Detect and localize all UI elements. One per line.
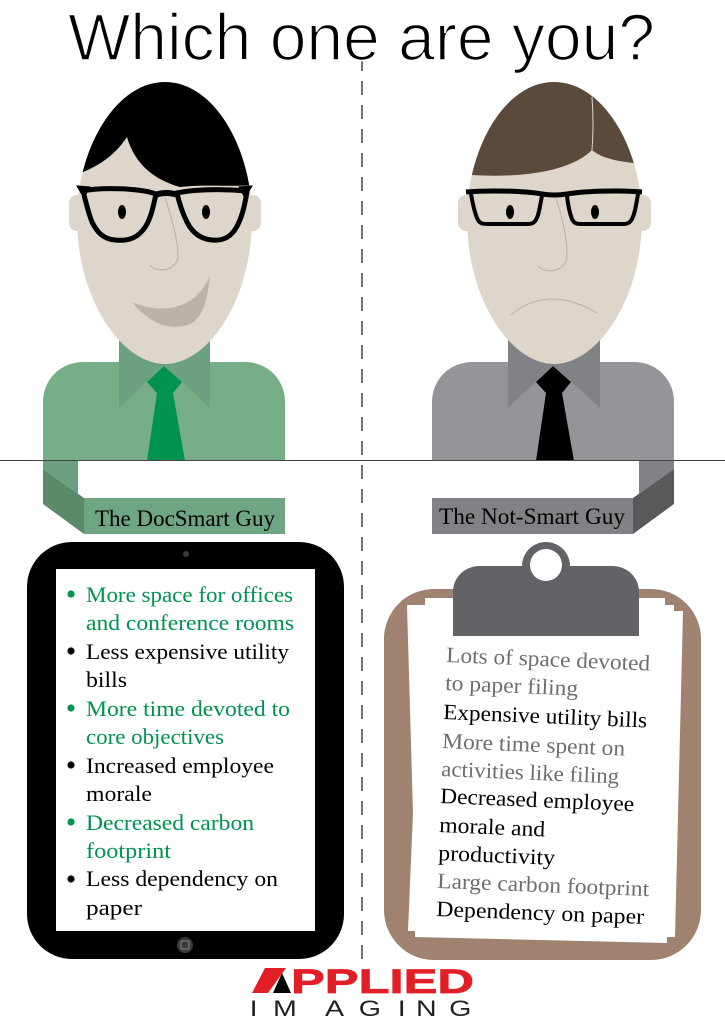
- shoulders: gray shirt: [432, 362, 674, 461]
- label ribbon: The DocSmart Guy: [43, 461, 285, 534]
- benefits list: Decreased carbon: [86, 810, 254, 835]
- left ear: [69, 195, 85, 231]
- drawbacks list: Large carbon footprint: [437, 868, 650, 901]
- benefits list: More space for offices: [86, 582, 293, 607]
- benefits list: core objectives: [86, 724, 224, 749]
- glasses: [466, 191, 642, 224]
- clip hole: [530, 549, 562, 581]
- shoulders: green shirt: [43, 362, 285, 461]
- benefits list: bills: [86, 667, 127, 692]
- hair: [472, 82, 634, 176]
- benefits list: Less expensive utility: [86, 639, 289, 664]
- benefits list: More time devoted to: [86, 696, 290, 721]
- drawbacks list: productivity: [438, 840, 556, 870]
- frown: [511, 299, 597, 315]
- drawbacks list: to paper filing: [445, 670, 579, 701]
- logo mark: [252, 968, 291, 993]
- tie: [147, 366, 185, 461]
- drawbacks list: morale and: [439, 812, 546, 841]
- logo: Applied Imaging: [250, 963, 474, 1021]
- hair parting: [592, 97, 593, 150]
- eyes: [506, 205, 599, 219]
- benefits list: Less dependency on: [86, 866, 278, 891]
- nose: [150, 197, 178, 270]
- drawbacks list: Lots of space devoted: [446, 642, 651, 676]
- drawbacks list: [436, 642, 651, 929]
- nose: [538, 198, 567, 271]
- panel: tablet with DocSmart benefits: [27, 542, 344, 959]
- collar: [119, 340, 210, 408]
- tie: [536, 366, 574, 461]
- benefits list: and conference rooms: [86, 610, 294, 635]
- bullet markers: [67, 590, 75, 883]
- collar: [508, 340, 600, 408]
- logo word: imaging: IMAGING: [250, 997, 471, 1021]
- benefits list: morale: [86, 781, 152, 806]
- character: Not-Smart guy: [432, 70, 674, 461]
- benefits list: Increased employee: [86, 753, 274, 778]
- drawbacks list: Dependency on paper: [436, 896, 645, 929]
- drawbacks list: activities like filing: [441, 756, 620, 788]
- drawbacks list: Decreased employee: [440, 783, 635, 816]
- label text: The Not-Smart Guy: [439, 504, 626, 529]
- panel: clipboard with Not-Smart drawbacks: [384, 542, 701, 960]
- hair: [82, 82, 250, 187]
- icon: tablet home button: [177, 937, 193, 953]
- eyes: [118, 205, 210, 219]
- paper sheet: [407, 598, 683, 943]
- right ear: [635, 195, 651, 231]
- label text: The DocSmart Guy: [95, 506, 275, 531]
- benefits list: paper: [86, 895, 143, 920]
- icon: tablet camera: [183, 551, 189, 557]
- smile: [132, 275, 210, 327]
- right ear: [245, 195, 261, 231]
- face: [77, 82, 252, 364]
- face: [467, 82, 642, 364]
- left ear: [458, 195, 474, 231]
- title: Which one are you?: [68, 0, 655, 74]
- logo word: applied: PPLIED: [291, 963, 474, 1001]
- benefits list: footprint: [86, 838, 171, 863]
- label ribbon: The Not-Smart Guy: [432, 461, 674, 534]
- clip: [453, 542, 639, 636]
- character: DocSmart guy: [43, 70, 285, 461]
- drawbacks list: Expensive utility bills: [443, 699, 648, 733]
- drawbacks list: More time spent on: [442, 728, 626, 761]
- glasses: [77, 186, 252, 240]
- benefits list: [86, 582, 294, 920]
